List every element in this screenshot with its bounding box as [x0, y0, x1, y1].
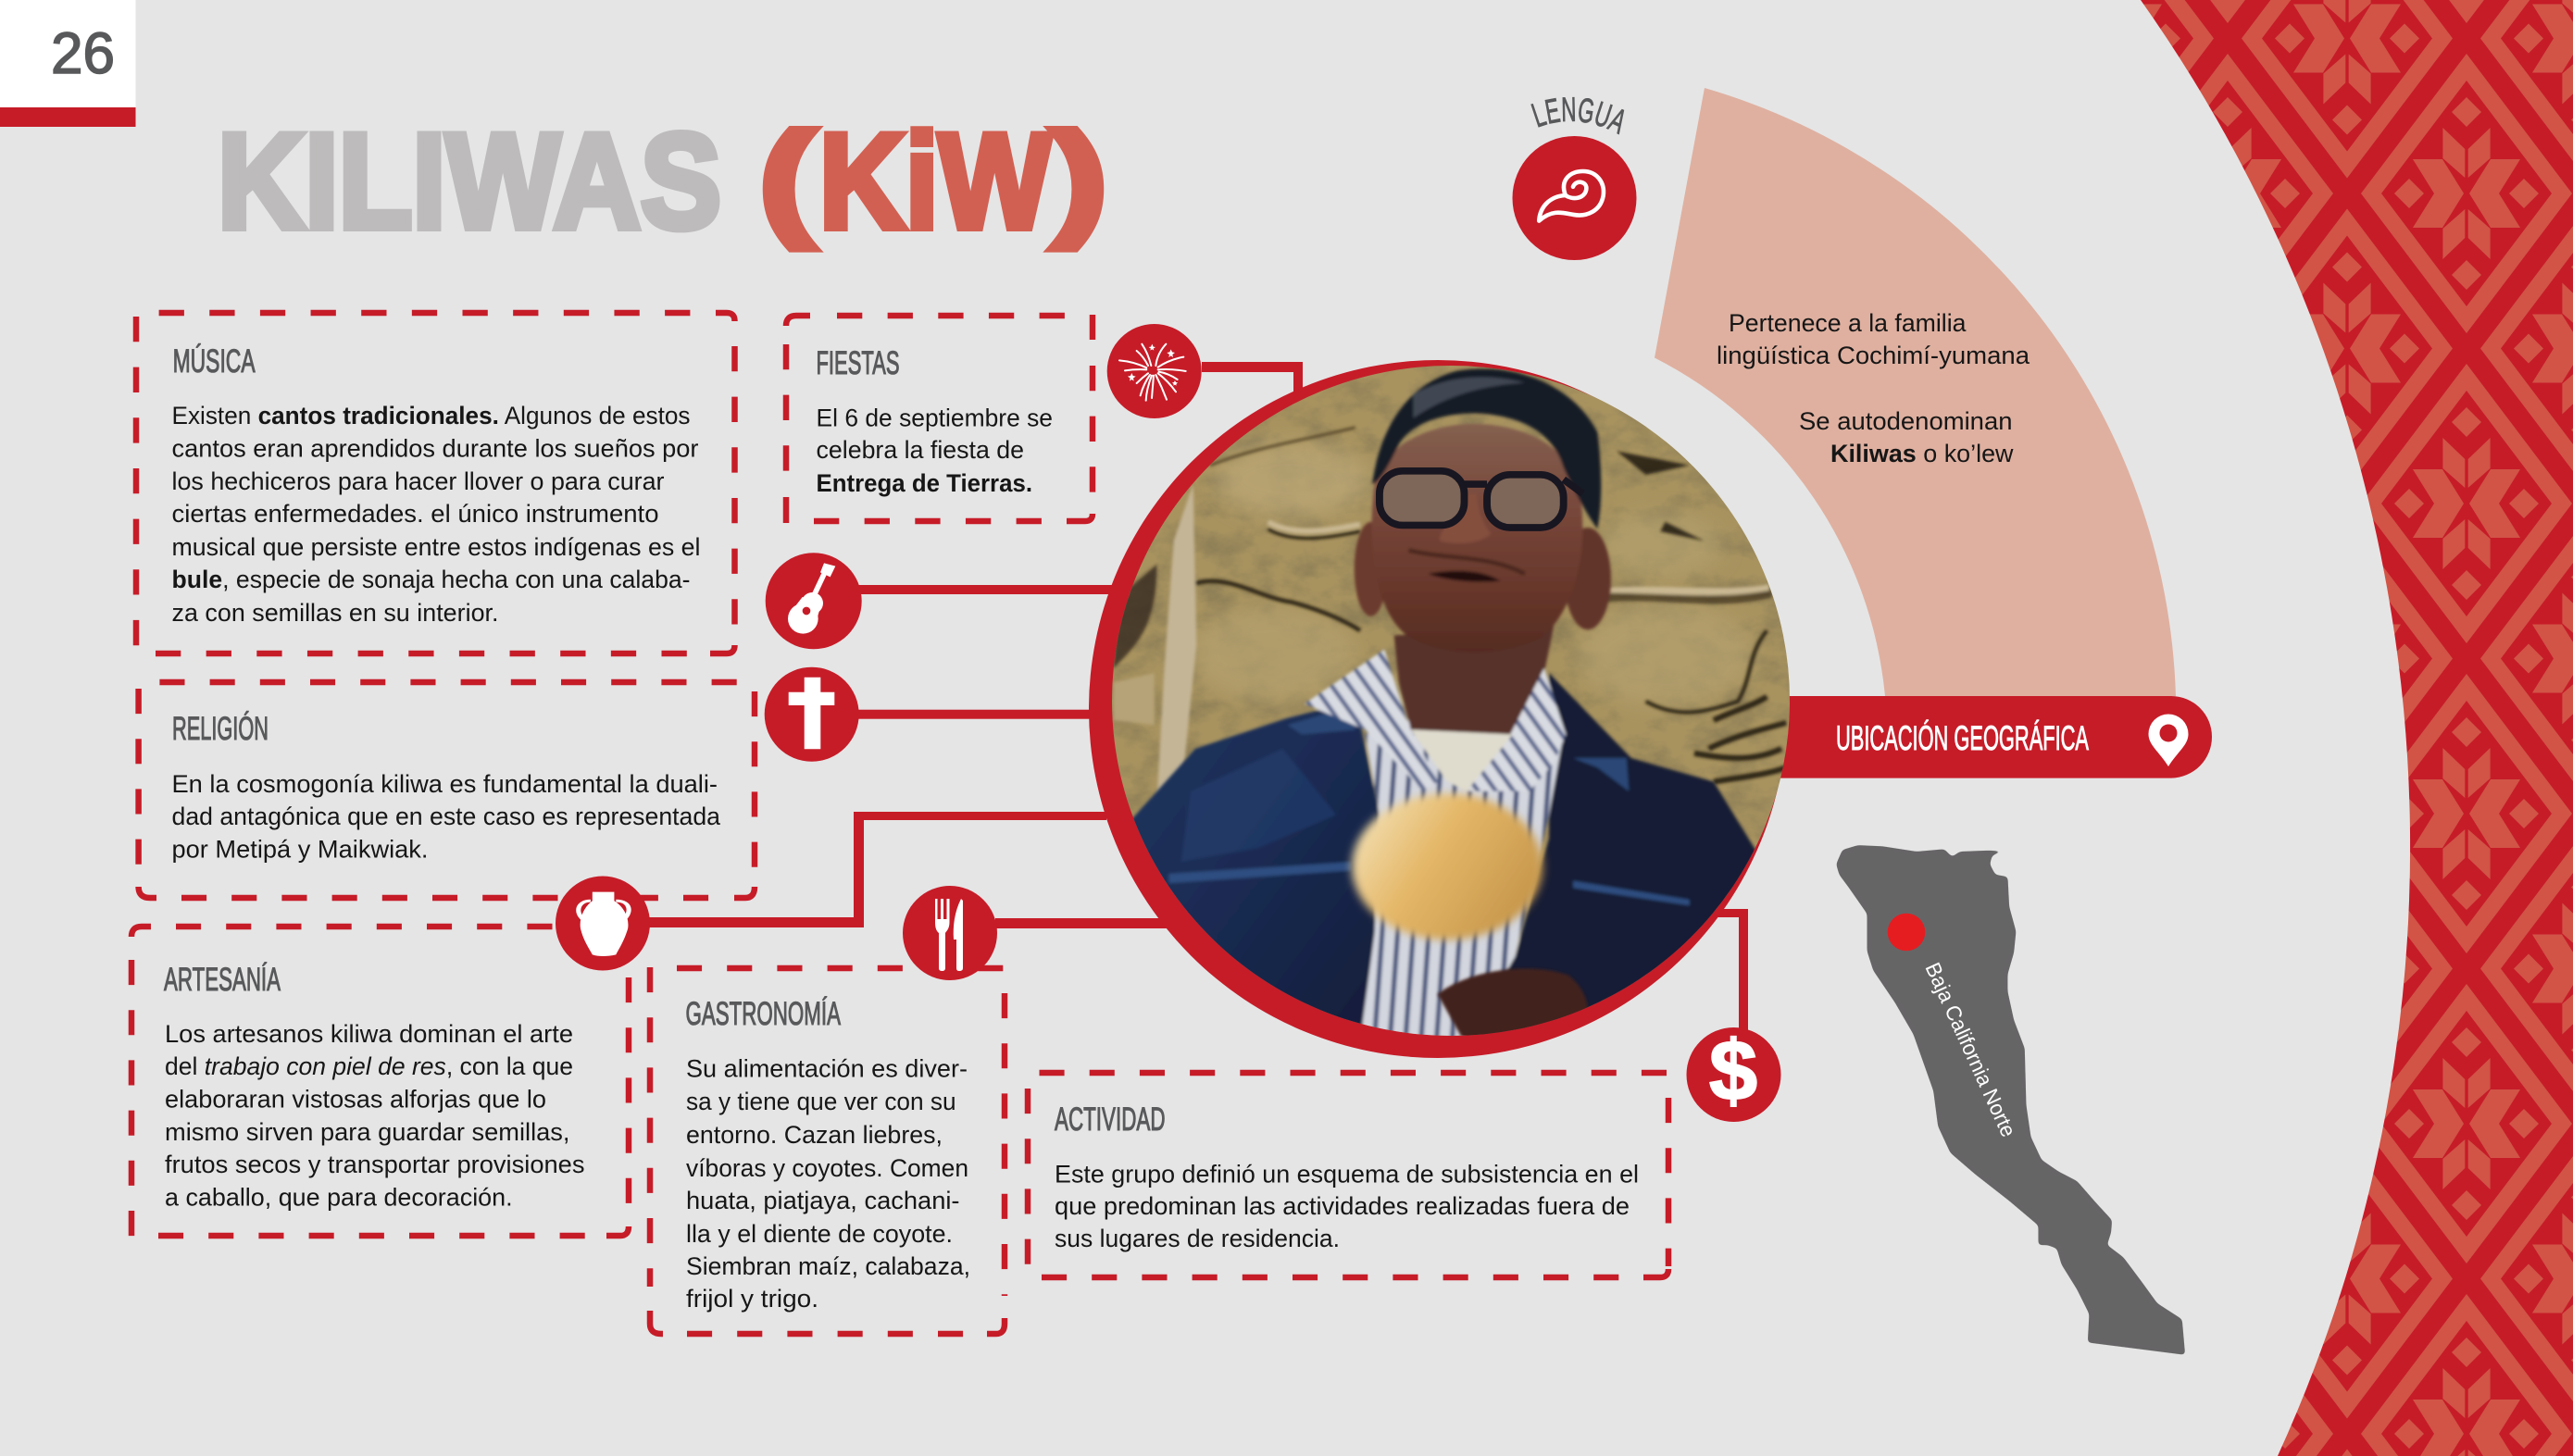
panel: gastronomia: GASTRONOMÍA — [685, 996, 841, 1032]
undershirt — [1411, 729, 1513, 791]
panel: fiestas: Entrega de Tierras. — [817, 469, 1032, 497]
heading: lengua curved label — [1530, 96, 1624, 135]
panel: musica: musical que persiste entre estos indígenas es el — [172, 533, 700, 561]
icon: fireworks — [1107, 324, 1202, 418]
title: KILIWAS — [218, 106, 721, 256]
panel: lengua wedge: lingüística Cochimí-yumana — [1717, 342, 2030, 369]
panel: musica: ciertas enfermedades. el único instrumento — [172, 500, 659, 528]
shirt collar — [1305, 650, 1438, 791]
heading: lengua curved label: LENGUA — [1530, 96, 1624, 135]
panel: fiestas — [786, 315, 1093, 523]
title: KiW — [819, 106, 1051, 256]
panel: religion: En la cosmogonía kiliwa es fundamental la duali- — [172, 770, 718, 798]
photo: kiliwa man with gourd rattle — [1112, 366, 1790, 1036]
panel: ubicacion geografica pill: UBICACIÓN GEOGRÁFICA — [1836, 719, 2089, 757]
panel: artesania: Los artesanos kiliwa dominan el arte — [165, 1020, 573, 1048]
nose — [1440, 493, 1491, 543]
panel: lengua wedge: Se autodenominan — [1799, 407, 2013, 435]
panel: artesania: a caballo, que para decoración. — [165, 1183, 513, 1211]
panel: artesania: del trabajo con piel de res, con la que — [165, 1052, 573, 1080]
panel: gastronomia: Su alimentación es diver- — [686, 1055, 968, 1083]
gourd rattle — [1352, 793, 1543, 940]
panel: actividad: sus lugares de residencia. — [1055, 1225, 1340, 1252]
glasses — [1380, 471, 1583, 528]
panel: religion: por Metipá y Maikwiak. — [172, 836, 428, 864]
panel: fiestas: FIESTAS — [817, 345, 900, 381]
panel: gastronomia: Siembran maíz, calabaza, — [686, 1252, 970, 1280]
panel: religion — [139, 682, 755, 898]
panel: artesania: elaboraran vistosas alforjas que lo — [165, 1085, 546, 1113]
panel: artesania: frutos secos y transportar provisiones — [165, 1151, 585, 1178]
panel: musica — [136, 313, 735, 653]
hair — [1372, 368, 1601, 529]
panel: gastronomia: huata, piatjaya, cachani- — [686, 1187, 959, 1214]
panel: gastronomia: entorno. Cazan liebres, — [686, 1121, 943, 1149]
panel: actividad — [1028, 1073, 1668, 1277]
panel: musica: Existen cantos tradicionales. Algunos de estos — [172, 402, 691, 429]
title: ) — [1052, 107, 1107, 250]
page number tab: 26 — [51, 21, 115, 86]
panel: musica: bule, especie de sonaja hecha con una calaba- — [172, 566, 691, 593]
icon: dollar: $ — [1709, 1024, 1757, 1118]
panel: fiestas: El 6 de septiembre se — [817, 404, 1053, 431]
map marker — [1888, 914, 1925, 951]
ears — [1355, 522, 1387, 616]
mouth — [1428, 571, 1501, 582]
panel: religion: RELIGIÓN — [172, 711, 269, 747]
icon: fork and knife — [903, 886, 997, 980]
panel: fiestas: celebra la fiesta de — [817, 436, 1024, 464]
icon: cross — [765, 667, 859, 762]
icon: clay vase — [556, 876, 650, 970]
decorative textile band — [2111, 0, 2573, 1456]
connector lines — [648, 362, 1748, 1037]
panel: musica: cantos eran aprendidos durante los sueños por — [172, 435, 698, 463]
panel: musica: za con semillas en su interior. — [172, 599, 498, 627]
panel: lengua wedge: Pertenece a la familia — [1729, 309, 1967, 337]
page number tab — [0, 0, 135, 127]
panel: lengua wedge — [1655, 88, 2176, 696]
panel: ubicacion geografica pill — [1759, 696, 2212, 778]
icon: dollar — [1687, 1024, 1781, 1122]
panel: gastronomia — [650, 967, 1005, 1334]
map label: Baja California Norte — [1920, 959, 2021, 1140]
panel: religion: dad antagónica que en este caso es representada — [172, 803, 721, 830]
neck — [1394, 626, 1554, 734]
panel: actividad: ACTIVIDAD — [1055, 1101, 1165, 1138]
panel: musica: los hechiceros para hacer llover o para curar — [172, 467, 665, 495]
hand — [1438, 968, 1588, 1046]
panel: gastronomia: víboras y coyotes. Comen — [686, 1154, 968, 1182]
panel: actividad: que predominan las actividades realizadas fuera de — [1055, 1192, 1630, 1220]
face — [1372, 424, 1582, 653]
icon: location pin — [2148, 715, 2189, 766]
panel: actividad: Este grupo definió un esquema de subsistencia en el — [1055, 1160, 1639, 1188]
panel: artesania — [131, 927, 629, 1237]
icon: lengua speech swirl — [1513, 136, 1637, 260]
title — [218, 106, 1107, 256]
map: Baja California Norte — [1836, 845, 2185, 1355]
panel: gastronomia: frijol y trigo. — [686, 1285, 818, 1313]
panel: artesania: mismo sirven para guardar semillas, — [165, 1118, 570, 1146]
panel: lengua wedge: Kiliwas o ko’lew — [1830, 440, 2014, 467]
photo ring — [1089, 360, 1787, 1058]
title: ( — [759, 107, 815, 250]
panel: artesania: ARTESANÍA — [164, 962, 281, 998]
panel: gastronomia: sa y tiene que ver con su — [686, 1088, 956, 1115]
panel: gastronomia: lla y el diente de coyote. — [686, 1220, 953, 1248]
jacket — [1132, 709, 1380, 1024]
icon: guitar — [766, 553, 862, 649]
panel: musica: MÚSICA — [173, 343, 256, 380]
shirt — [1360, 720, 1564, 1041]
